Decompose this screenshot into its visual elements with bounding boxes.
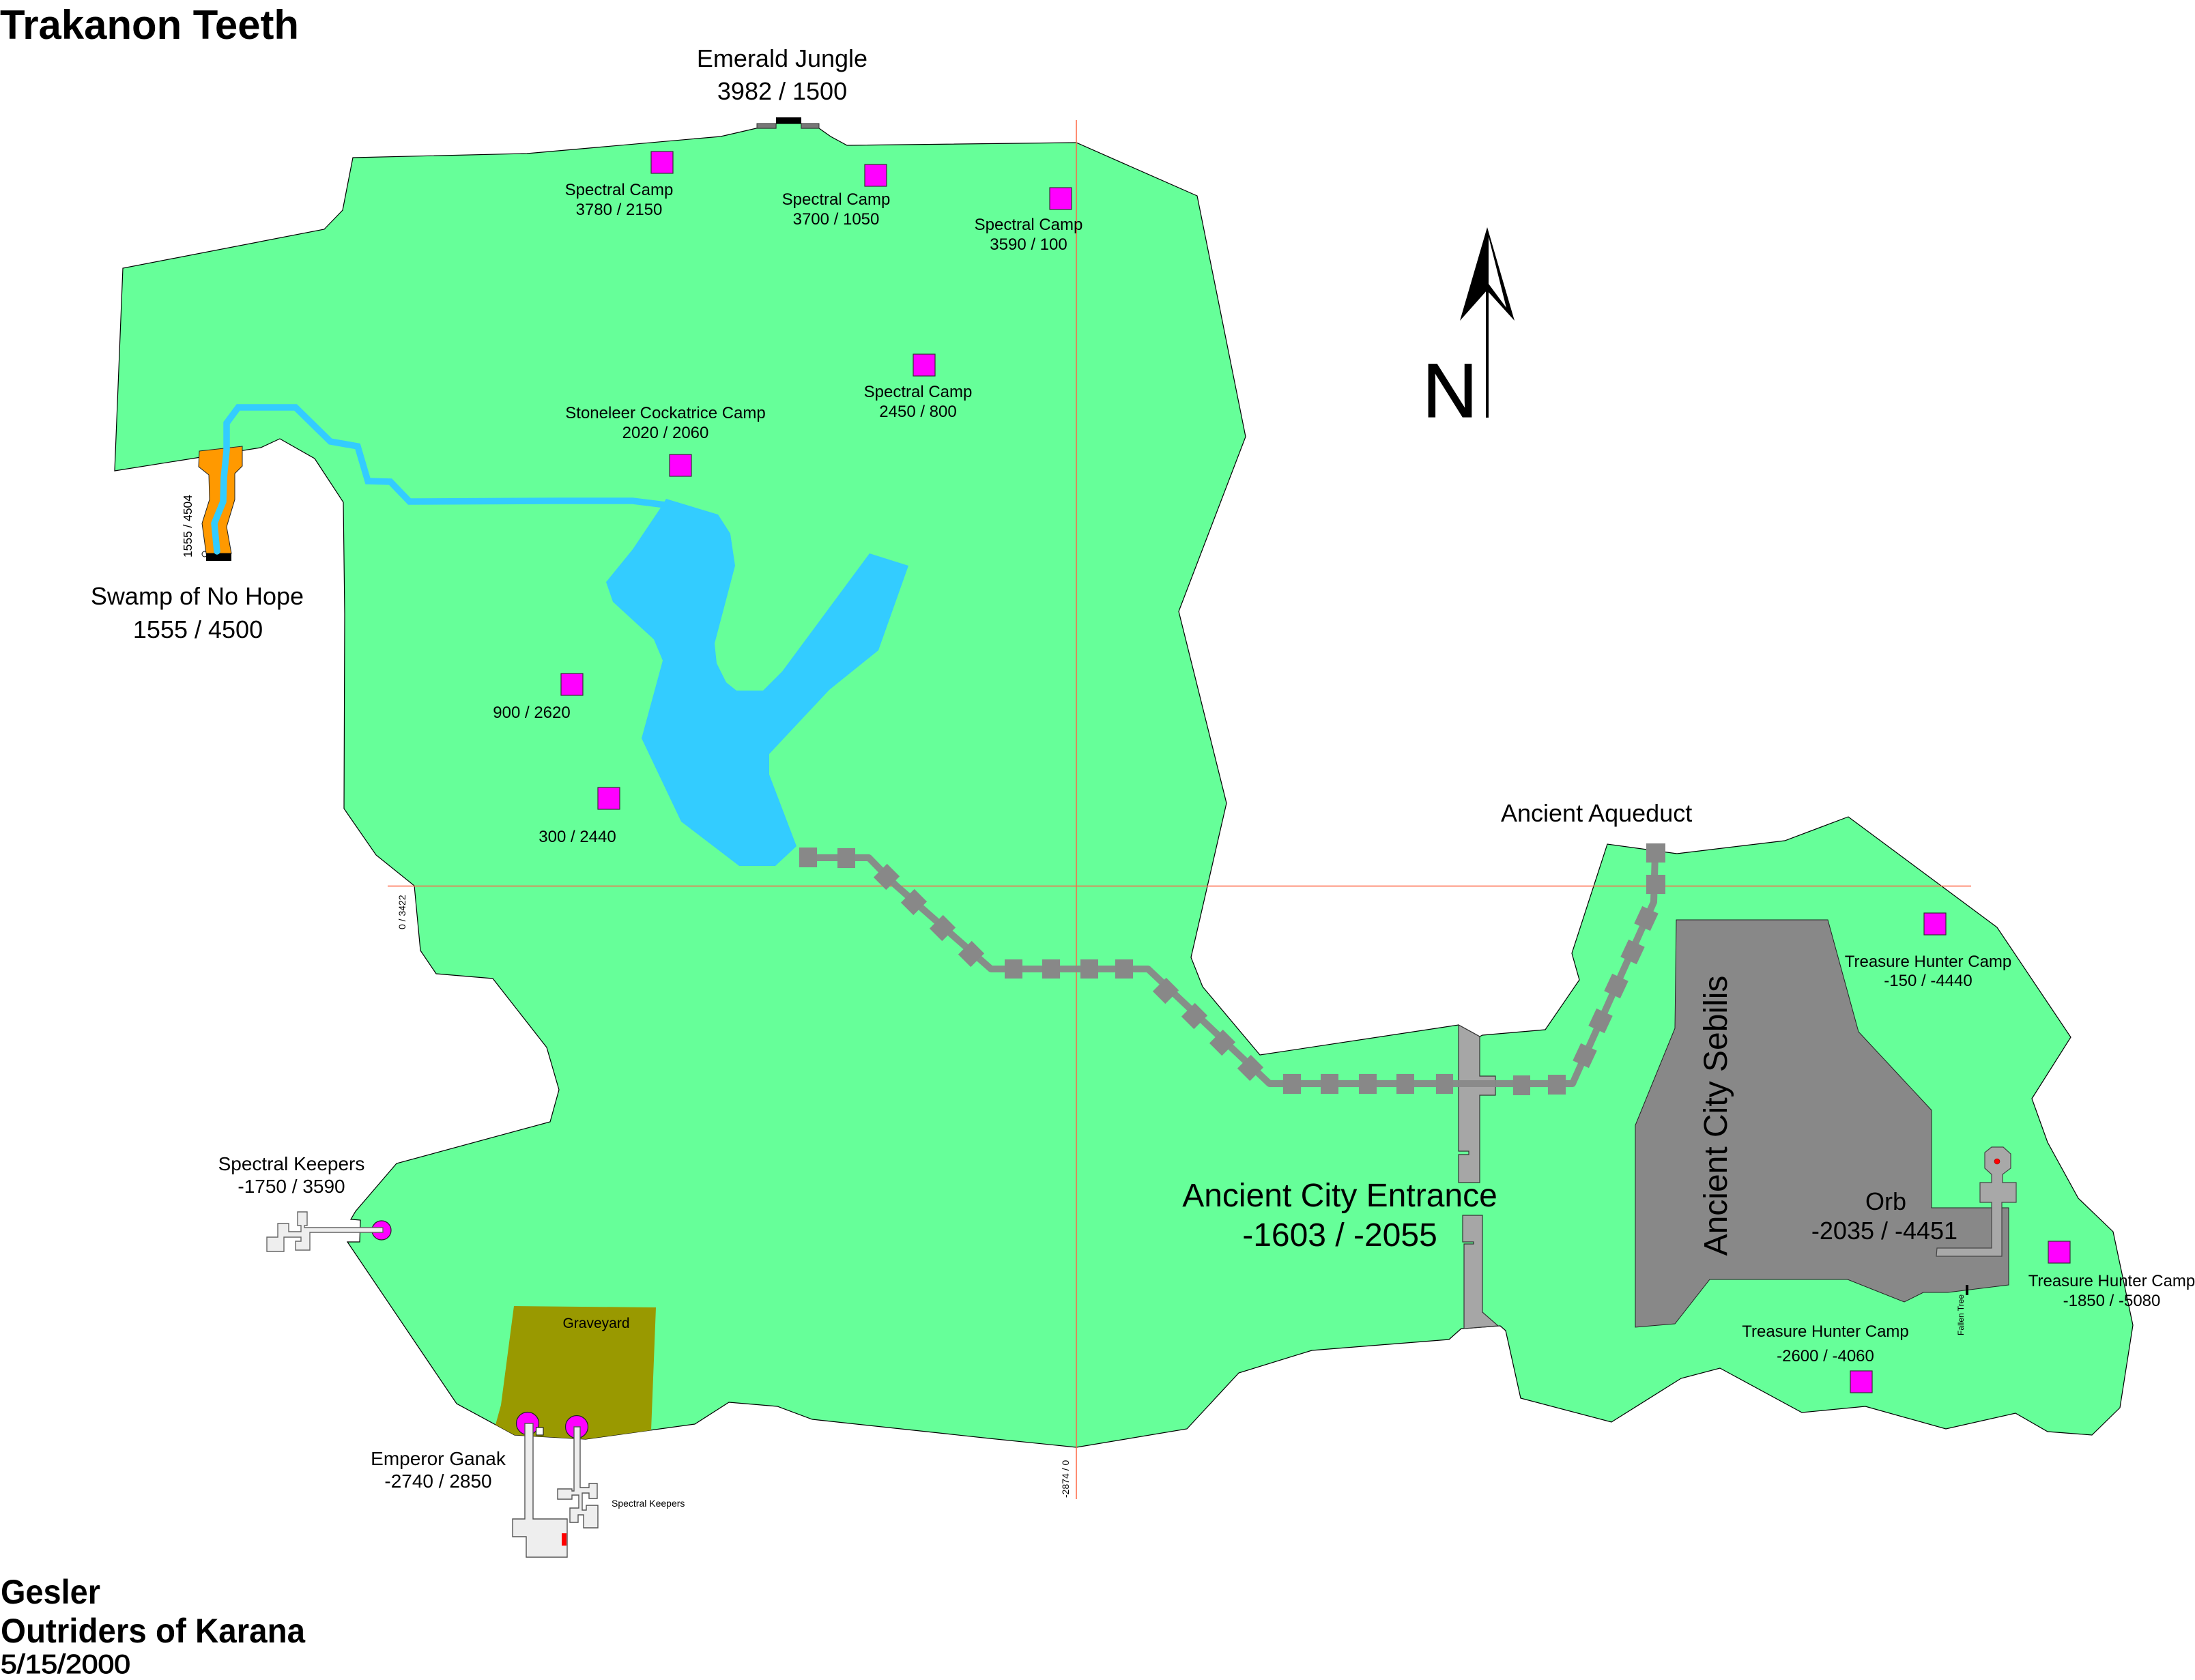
swamp of no hope zone line bbox=[199, 446, 242, 561]
label: spectral keepers: -1750 / 3590 bbox=[238, 1176, 345, 1197]
label: ancient city entrance: Ancient City Entrance bbox=[1182, 1178, 1497, 1214]
camp marker: -1850 / -5080 bbox=[2048, 1241, 2070, 1263]
label: stoneleer cockatrice camp: Stoneleer Cockatrice Camp bbox=[565, 404, 766, 422]
credit: date: 5/15/2000 bbox=[1, 1650, 130, 1679]
white marker bbox=[536, 1428, 543, 1435]
camp marker: 2020 / 2060 bbox=[670, 454, 691, 476]
grid line: vertical axis bbox=[1076, 120, 1077, 1499]
emperor ganak portal bbox=[516, 1413, 539, 1434]
label: 300 / 2440: 300 / 2440 bbox=[539, 828, 616, 846]
label: emperor ganak: Emperor Ganak bbox=[371, 1448, 506, 1469]
spectral keepers portal south bbox=[565, 1415, 588, 1438]
label: treasure hunter camp -150 / -4440: -150 / -4440 bbox=[1884, 972, 1972, 990]
camp marker: 3700 / 1050 bbox=[865, 164, 887, 186]
label: spectral camp 3590 / 100: Spectral Camp bbox=[975, 216, 1082, 234]
lake bbox=[606, 499, 908, 866]
label: spectral camp 2450 / 800: Spectral Camp bbox=[864, 383, 972, 401]
aqueduct path bbox=[799, 843, 1665, 1095]
bridge north section bbox=[1459, 1025, 1495, 1183]
spectral keepers portal bbox=[372, 1221, 391, 1240]
river bbox=[214, 407, 665, 551]
graveyard area bbox=[496, 1306, 656, 1439]
label: emerald jungle: Emerald Jungle bbox=[697, 44, 867, 72]
title: Trakanon Teeth bbox=[0, 2, 299, 48]
landmass bbox=[115, 124, 2133, 1447]
label: 900 / 2620: 900 / 2620 bbox=[493, 704, 571, 722]
bridge south section bbox=[1463, 1215, 1498, 1329]
label: graveyard: Graveyard bbox=[562, 1316, 630, 1331]
label: emerald jungle: 3982 / 1500 bbox=[717, 77, 847, 105]
grid line: horizontal axis bbox=[388, 886, 1971, 887]
camp marker: 900 / 2620 bbox=[561, 674, 583, 695]
label: treasure hunter camp -2600 / -4060: Treasure Hunter Camp bbox=[1742, 1322, 1909, 1341]
orb tower bbox=[1936, 1147, 2016, 1256]
emperor ganak dungeon bbox=[513, 1423, 567, 1557]
label: treasure hunter camp -150 / -4440: Treasure Hunter Camp bbox=[1845, 953, 2011, 971]
label: spectral camp 3700 / 1050: 3700 / 1050 bbox=[793, 210, 879, 229]
label: swamp of no hope: 1555 / 4500 bbox=[133, 615, 263, 643]
label: ancient aqueduct: Ancient Aqueduct bbox=[1501, 799, 1692, 827]
label: spectral camp 3590 / 100: 3590 / 100 bbox=[990, 235, 1067, 254]
label: ancient city entrance: -1603 / -2055 bbox=[1242, 1217, 1437, 1254]
label: emperor ganak: -2740 / 2850 bbox=[384, 1471, 492, 1492]
spectral keepers dungeon south bbox=[558, 1427, 598, 1528]
spectral keepers dungeon bbox=[267, 1212, 383, 1251]
label: axis 0 / 3422: 0 / 3422 bbox=[397, 895, 407, 929]
label: stoneleer cockatrice camp: 2020 / 2060 bbox=[622, 424, 708, 442]
label: treasure hunter camp -1850 / -5080: -1850 / -5080 bbox=[2063, 1292, 2160, 1310]
compass north arrow: N bbox=[1422, 348, 1478, 433]
label: spectral camp 3780 / 2150: Spectral Camp bbox=[565, 181, 673, 199]
label: swamp of no hope: Swamp of No Hope bbox=[91, 582, 304, 610]
label: axis -2874 / 0: -2874 / 0 bbox=[1060, 1460, 1071, 1498]
camp marker: -150 / -4440 bbox=[1924, 913, 1946, 935]
credit: guild: Outriders of Karana bbox=[1, 1612, 306, 1650]
label: orb: -2035 / -4451 bbox=[1811, 1217, 1957, 1245]
label: spectral keepers south: Spectral Keepers bbox=[612, 1498, 685, 1509]
label: orb: Orb bbox=[1865, 1187, 1906, 1215]
fallen tree marker bbox=[1966, 1285, 1968, 1295]
camp marker: 3780 / 2150 bbox=[651, 151, 673, 173]
label: swamp coordinates: 1555 / 4504 bbox=[181, 495, 195, 557]
label: spectral camp 3700 / 1050: Spectral Camp bbox=[782, 190, 890, 209]
compass north arrow bbox=[1422, 227, 1515, 433]
label: fallen tree: Fallen Tree bbox=[1956, 1294, 1966, 1335]
label: ancient city sebilis: Ancient City Sebilis bbox=[1698, 976, 1734, 1256]
label: spectral camp 3780 / 2150: 3780 / 2150 bbox=[576, 201, 662, 219]
label: treasure hunter camp -1850 / -5080: Treasure Hunter Camp bbox=[2028, 1272, 2195, 1290]
label: spectral camp 2450 / 800: 2450 / 800 bbox=[879, 403, 957, 421]
emerald jungle zone line bbox=[757, 117, 819, 128]
credit: author: Gesler bbox=[1, 1573, 100, 1611]
camp marker: -2600 / -4060 bbox=[1850, 1371, 1872, 1393]
label: treasure hunter camp -2600 / -4060: -2600 / -4060 bbox=[1777, 1347, 1874, 1365]
ancient city sebilis area bbox=[1635, 920, 2009, 1327]
camp marker: 3590 / 100 bbox=[1050, 188, 1072, 209]
camp marker: 2450 / 800 bbox=[913, 354, 935, 376]
label: spectral keepers: Spectral Keepers bbox=[218, 1153, 364, 1174]
camp marker: 300 / 2440 bbox=[598, 787, 620, 809]
